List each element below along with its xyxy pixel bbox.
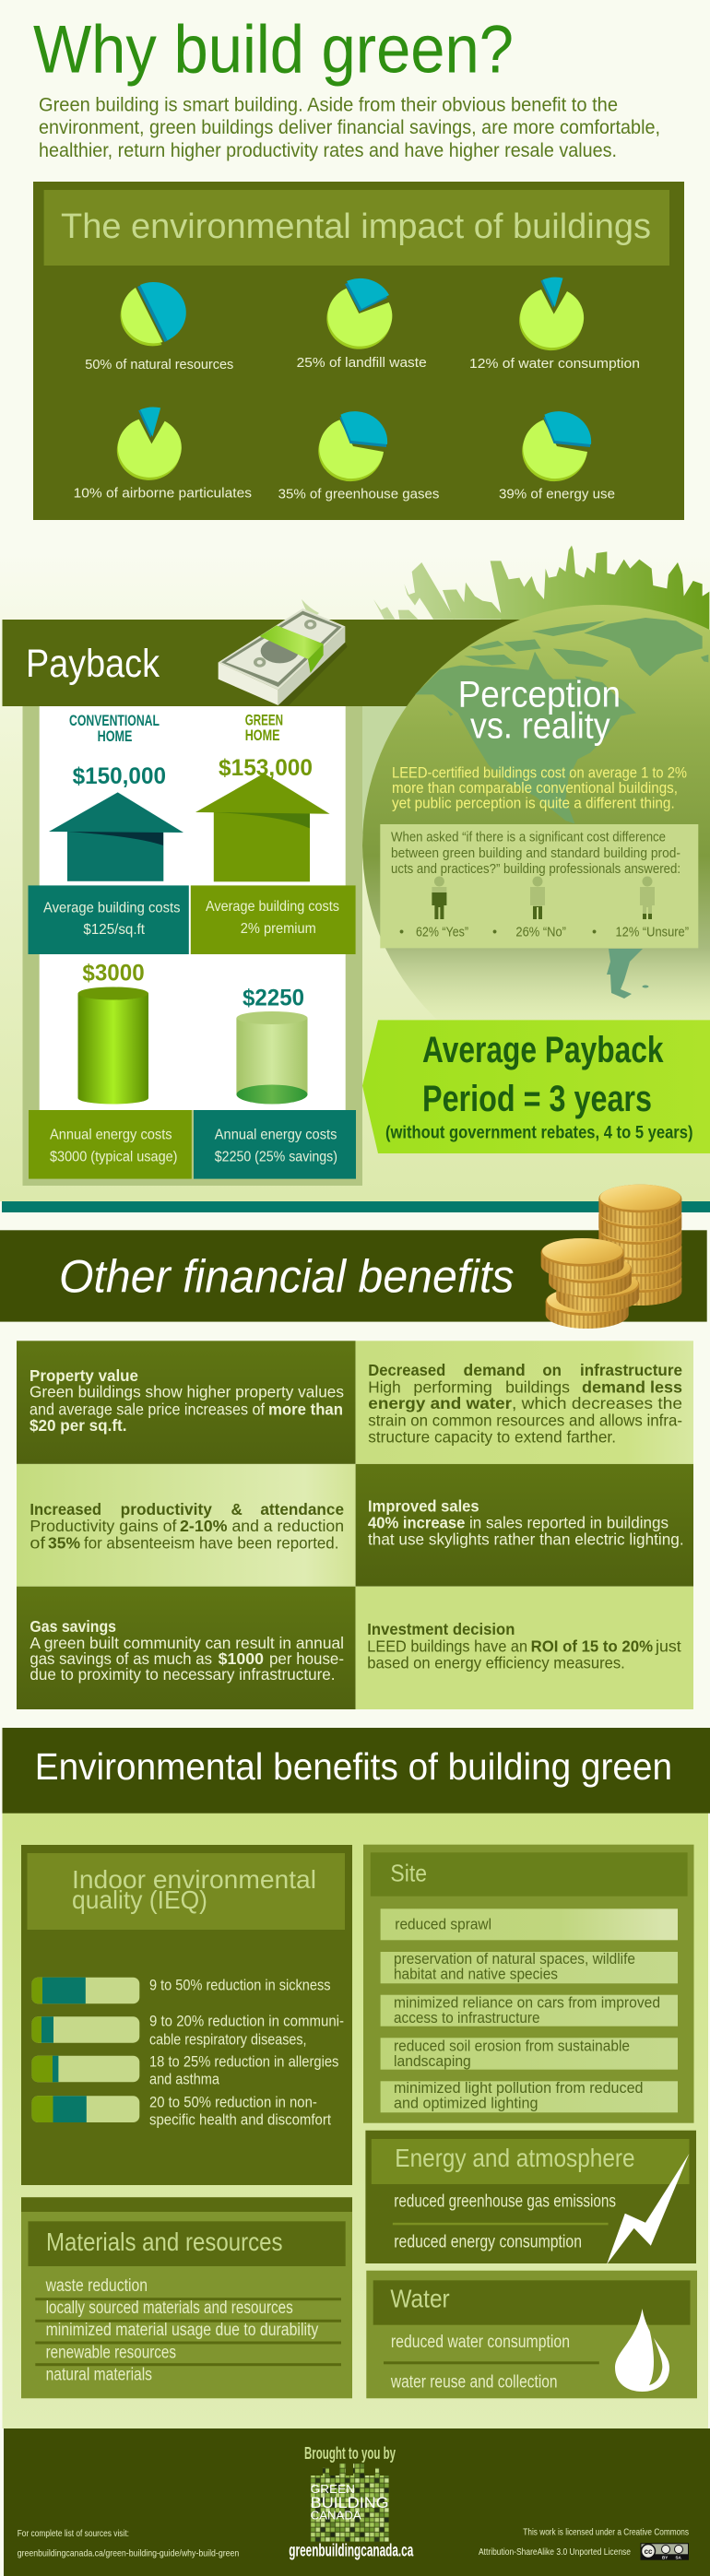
box: typical energy costs: $3000 (typical usage)	[50, 1149, 177, 1164]
cell: gas savings: gas savings of as much as	[30, 1649, 212, 1668]
panel heading: water	[373, 2280, 690, 2325]
icon: person 12%	[640, 876, 655, 919]
icon: water drop	[615, 2309, 669, 2392]
item: soil erosion	[381, 2037, 678, 2070]
materials list: minimized material usage due to durability	[46, 2321, 319, 2340]
callout arrow: average payback period	[362, 1020, 710, 1153]
panel: materials and resources	[21, 2197, 352, 2398]
cell: gas savings: Gas savings	[30, 1617, 116, 1636]
light wedge beside globe	[362, 706, 408, 834]
value: $3000: $3000	[82, 961, 145, 987]
cell: property value: more than	[268, 1400, 343, 1418]
heading: perception vs. reality: Perception	[458, 675, 621, 715]
survey answers: •	[592, 926, 597, 940]
cell: investment decision	[356, 1587, 693, 1709]
cell: increased productivity and attendance	[17, 1464, 356, 1587]
bar labels: cable respiratory diseases,	[149, 2032, 306, 2049]
cell: decreased demand on infrastructure: buildings	[505, 1377, 570, 1396]
item: preservation	[381, 1950, 678, 1983]
header: green home	[245, 712, 283, 744]
icon: gold coin stacks	[541, 1185, 681, 1329]
item: reduced sprawl	[381, 1908, 678, 1940]
item: reliance on cars: access to infrastructure	[394, 2009, 540, 2027]
label: 35% of greenhouse gases: 35% of greenhouse gases	[278, 486, 439, 502]
item: reliance on cars: minimized reliance on cars from improved	[394, 1993, 660, 2011]
cell: improved sales: in sales reported in buildings	[469, 1514, 669, 1532]
panel: financial benefits grid	[17, 1341, 693, 1709]
cell: decreased demand on infrastructure: structure capacity to extend farther.	[368, 1427, 616, 1446]
cell: increased productivity and attendance: Productivity gains of	[30, 1517, 177, 1535]
cell: property value: and average sale price increases of	[30, 1400, 265, 1418]
panel heading: IEQ	[28, 1853, 345, 1930]
label: 12% of water consumption: 12% of water consumption	[469, 356, 640, 372]
logo: green building canada: CANADA	[311, 2509, 361, 2523]
text: sources: For complete list of sources visit:	[18, 2528, 129, 2539]
value: $153,000: $153,000	[219, 755, 313, 781]
survey answers: •	[399, 926, 404, 940]
cell: improved sales: that use skylights rather than electric lighting.	[368, 1530, 684, 1549]
box: green building costs	[191, 885, 356, 954]
pie chart: 10% of airborne particulates	[117, 407, 182, 480]
icon: creative commons badge: BY	[662, 2556, 668, 2559]
pie chart: 50% of natural resources	[121, 282, 186, 346]
icon: creative commons badge: cc	[645, 2547, 653, 2556]
item: light pollution: minimized light pollution from reduced	[394, 2079, 644, 2097]
cell: decreased demand on infrastructure: High	[368, 1377, 401, 1396]
cell: property value: Property value	[30, 1366, 138, 1385]
item: preservation: habitat and native species	[394, 1966, 558, 1983]
cell: improved sales: 40% increase	[368, 1514, 466, 1532]
text: sources	[18, 2528, 239, 2559]
section background: environmental benefits	[2, 1813, 708, 2428]
survey answers: 26% “No”	[515, 926, 566, 940]
cell: investment decision: Investment decision	[367, 1620, 515, 1638]
survey answers	[399, 926, 689, 940]
item: light pollution	[381, 2079, 678, 2112]
cell: decreased demand on infrastructure	[356, 1341, 693, 1464]
bar labels: specific health and discomfort	[149, 2111, 331, 2128]
panel: environmental impact of buildings	[33, 182, 684, 520]
panel heading: site	[371, 1852, 688, 1897]
cell: investment decision: based on energy efficiency measures.	[367, 1653, 625, 1672]
intro text block: Green building is smart building. Aside from their obvious benefit to the	[39, 94, 618, 116]
panel: indoor environmental quality	[21, 1845, 352, 2185]
intro text block: environment, green buildings deliver financial savings, are more comfortable,	[39, 116, 660, 138]
banner: other financial benefits	[0, 1230, 707, 1322]
box: green building costs: 2% premium	[241, 921, 316, 937]
icon: person 62%	[432, 876, 446, 919]
item: light pollution: and optimized lighting	[394, 2095, 538, 2112]
heading: perception vs. reality	[458, 675, 621, 747]
panel heading: environmental impact	[44, 190, 669, 266]
panel heading: environmental impact: The environmental impact of buildings	[61, 207, 651, 246]
intro text block: healthier, return higher productivity rates and have higher resale values.	[39, 139, 617, 161]
cell: increased productivity and attendance: Increased	[30, 1500, 101, 1518]
pie chart: 39% of energy use	[522, 411, 591, 481]
panel heading: IEQ: Indoor environmental	[72, 1865, 316, 1894]
header: conventional home: CONVENTIONAL	[69, 712, 160, 729]
materials list: locally sourced materials and resources	[46, 2298, 293, 2318]
panel heading: energy	[372, 2139, 690, 2184]
text: license	[479, 2526, 689, 2558]
text: LEED cost statement: more than comparable conventional buildings,	[392, 780, 678, 797]
value: $150,000: $150,000	[73, 763, 166, 789]
bar labels	[149, 1977, 344, 2128]
chart: full energy cylinder	[77, 987, 148, 1105]
item: reduced sprawl: reduced sprawl	[395, 1915, 491, 1932]
box: conventional building costs: $125/sq.ft	[83, 922, 146, 938]
heading: perception vs. reality: vs. reality	[470, 706, 610, 747]
header: green home: HOME	[245, 727, 280, 744]
panel heading: site: Site	[390, 1860, 427, 1887]
cell: decreased demand on infrastructure: on	[542, 1361, 562, 1379]
skyline illustration	[373, 546, 709, 698]
box: typical energy costs	[29, 1110, 192, 1179]
header: conventional home: HOME	[98, 727, 132, 745]
cell: gas savings: due to proximity to necessary infrastructure.	[30, 1665, 336, 1684]
label: 25% of landfill waste: 25% of landfill waste	[297, 355, 427, 371]
cell: increased productivity and attendance: attendance	[260, 1500, 344, 1518]
cell: increased productivity and attendance: of	[30, 1533, 45, 1552]
text: LEED cost statement: yet public perception is quite a different thing.	[392, 796, 675, 812]
cell: increased productivity and attendance: and a reduction	[232, 1517, 344, 1535]
panel: survey results: ucts and practices?” building professionals answered:	[391, 862, 680, 877]
item: water reuse: water reuse and collection	[390, 2372, 558, 2392]
bar labels: 9 to 50% reduction in sickness	[149, 1977, 330, 1993]
survey answers: •	[492, 926, 497, 940]
cell: increased productivity and attendance: &	[231, 1500, 243, 1518]
panel heading: materials	[28, 2221, 346, 2266]
cell: increased productivity and attendance: productivity	[121, 1500, 212, 1518]
pie chart: 12% of water consumption	[519, 278, 584, 350]
icon: creative commons badge	[640, 2543, 689, 2560]
payback banner	[2, 620, 555, 706]
text: license: Attribution-ShareAlike 3.0 Unported License	[479, 2546, 631, 2558]
item: energy consumption: reduced energy consumption	[394, 2232, 582, 2251]
box: conventional building costs: Average building costs	[43, 900, 181, 916]
cell: improved sales: Improved sales	[368, 1497, 479, 1516]
pie chart: 25% of landfill waste	[326, 278, 392, 349]
bar: respiratory disease reduction	[31, 2016, 139, 2043]
survey answers: 12% “Unsure”	[616, 926, 689, 940]
panel: survey results: between green building and standard building prod-	[391, 846, 680, 861]
panel heading: energy: Energy and atmosphere	[395, 2144, 635, 2172]
heading: Payback: Payback	[26, 642, 160, 686]
panel heading: materials: Materials and resources	[46, 2227, 282, 2256]
icon: conventional house	[49, 792, 183, 881]
panel heading: water: Water	[390, 2284, 450, 2312]
text: website: greenbuildingcanada.ca	[289, 2542, 414, 2561]
label: 50% of natural resources: 50% of natural resources	[85, 357, 233, 372]
icon: money stack	[219, 609, 348, 705]
box: green building costs: Average building costs	[206, 899, 339, 915]
header: green home: GREEN	[245, 712, 283, 728]
materials list: waste reduction	[45, 2276, 148, 2296]
item: reliance on cars	[381, 1993, 678, 2027]
panel: energy and atmosphere	[365, 2131, 696, 2264]
item: preservation: preservation of natural spaces, wildlife	[394, 1950, 635, 1967]
materials list: renewable resources	[46, 2343, 176, 2362]
cell: decreased demand on infrastructure: demand	[463, 1361, 526, 1379]
cell: investment decision: just	[655, 1637, 681, 1655]
cell: property value: Green buildings show higher property values	[30, 1383, 344, 1401]
box: conventional building costs	[28, 885, 189, 954]
bar: sickness reduction	[31, 1978, 139, 2003]
item: soil erosion: reduced soil erosion from sustainable	[394, 2037, 630, 2054]
chart: reduced energy cylinder	[236, 1011, 308, 1105]
south america	[607, 949, 649, 998]
materials list	[35, 2276, 341, 2384]
cell: investment decision: LEED buildings have an	[367, 1637, 527, 1655]
cell: decreased demand on infrastructure: energy and water	[368, 1394, 512, 1412]
icon: green house	[195, 774, 330, 881]
bar labels: 20 to 50% reduction in non-	[149, 2095, 317, 2111]
survey answers: 62% “Yes”	[416, 926, 468, 940]
heading: other financial benefits: Other financial benefits	[59, 1250, 515, 1302]
materials list: natural materials	[46, 2365, 152, 2384]
intro text block	[39, 94, 660, 161]
cell: decreased demand on infrastructure: strain on common resources and allows infra-	[368, 1411, 682, 1429]
item: soil erosion: landscaping	[394, 2052, 471, 2070]
label: 39% of energy use: 39% of energy use	[499, 486, 615, 502]
cell: decreased demand on infrastructure: infrastructure	[580, 1361, 682, 1379]
box: green energy costs: $2250 (25% savings)	[215, 1149, 337, 1164]
panel heading: IEQ: quality (IEQ)	[72, 1885, 207, 1914]
panel: cost comparison	[22, 706, 362, 1186]
box: green energy costs	[194, 1110, 356, 1179]
banner: environmental benefits of building green	[2, 1728, 710, 1814]
continents on globe	[415, 618, 708, 823]
pie chart: 35% of greenhouse gases	[318, 411, 387, 481]
label: 10% of airborne particulates: 10% of airborne particulates	[74, 486, 252, 502]
text: sources: greenbuildingcanada.ca/green-building-guide/why-build-green	[18, 2548, 239, 2559]
cell: gas savings: $1000	[219, 1649, 264, 1668]
panel: survey results: When asked “if there is a significant cost difference	[391, 830, 666, 845]
footer	[4, 2428, 710, 2576]
box: green energy costs: Annual energy costs	[215, 1127, 337, 1142]
header: conventional home	[69, 712, 160, 745]
box: typical energy costs: Annual energy costs	[50, 1127, 172, 1142]
cell: increased productivity and attendance: 2-10%	[180, 1517, 228, 1535]
cell: decreased demand on infrastructure: performing	[413, 1377, 492, 1396]
bar: allergy reduction	[31, 2056, 139, 2082]
logo: green building canada: BUILDING	[311, 2494, 389, 2511]
panel: site	[363, 1845, 693, 2123]
cell: property value	[17, 1341, 356, 1464]
value: $2250: $2250	[243, 985, 304, 1010]
bar labels: and asthma	[149, 2072, 220, 2088]
cell: gas savings: A green built community can result in annual	[30, 1634, 344, 1652]
cell: increased productivity and attendance: for absenteeism have been reported.	[84, 1533, 338, 1552]
teal divider strip	[2, 1201, 710, 1212]
cell: gas savings	[17, 1587, 356, 1709]
bar labels: 9 to 20% reduction in communi-	[149, 2013, 344, 2029]
logo: green building canada	[311, 2464, 389, 2542]
decorative swoosh above money	[302, 599, 319, 620]
cell: gas savings: per house-	[269, 1649, 344, 1668]
cell: property value: $20 per sq.ft.	[30, 1416, 127, 1435]
title: Why build green?	[33, 13, 514, 87]
section background: payback	[0, 553, 710, 1201]
text: brought to you by: Brought to you by	[304, 2444, 396, 2463]
icon: lightning bolt	[607, 2154, 690, 2264]
icon: creative commons badge: SA	[675, 2556, 682, 2559]
cell: decreased demand on infrastructure: , which decreases the	[512, 1394, 682, 1412]
cell: decreased demand on infrastructure: demand less	[582, 1377, 682, 1396]
text: LEED cost statement	[392, 764, 687, 812]
icon: person 26%	[530, 876, 545, 919]
logo: green building canada: GREEN	[311, 2482, 355, 2496]
panel: survey results	[380, 824, 698, 948]
cell: improved sales	[356, 1464, 693, 1587]
cell: increased productivity and attendance: 35%	[48, 1533, 80, 1552]
item: water consumption: reduced water consumption	[391, 2333, 570, 2352]
bar labels: 18 to 25% reduction in allergies	[149, 2054, 338, 2071]
callout arrow: average payback period: Period = 3 years	[422, 1079, 652, 1119]
banner: environmental benefits of building green: Environmental benefits of building green	[35, 1745, 672, 1788]
item: greenhouse gas: reduced greenhouse gas emissions	[394, 2192, 616, 2211]
cell: investment decision: ROI of 15 to 20%	[531, 1637, 653, 1655]
bar: discomfort reduction	[31, 2096, 139, 2122]
globe illustration	[362, 605, 710, 1010]
cell: decreased demand on infrastructure: Decreased	[368, 1361, 445, 1379]
panel: water	[366, 2271, 697, 2398]
